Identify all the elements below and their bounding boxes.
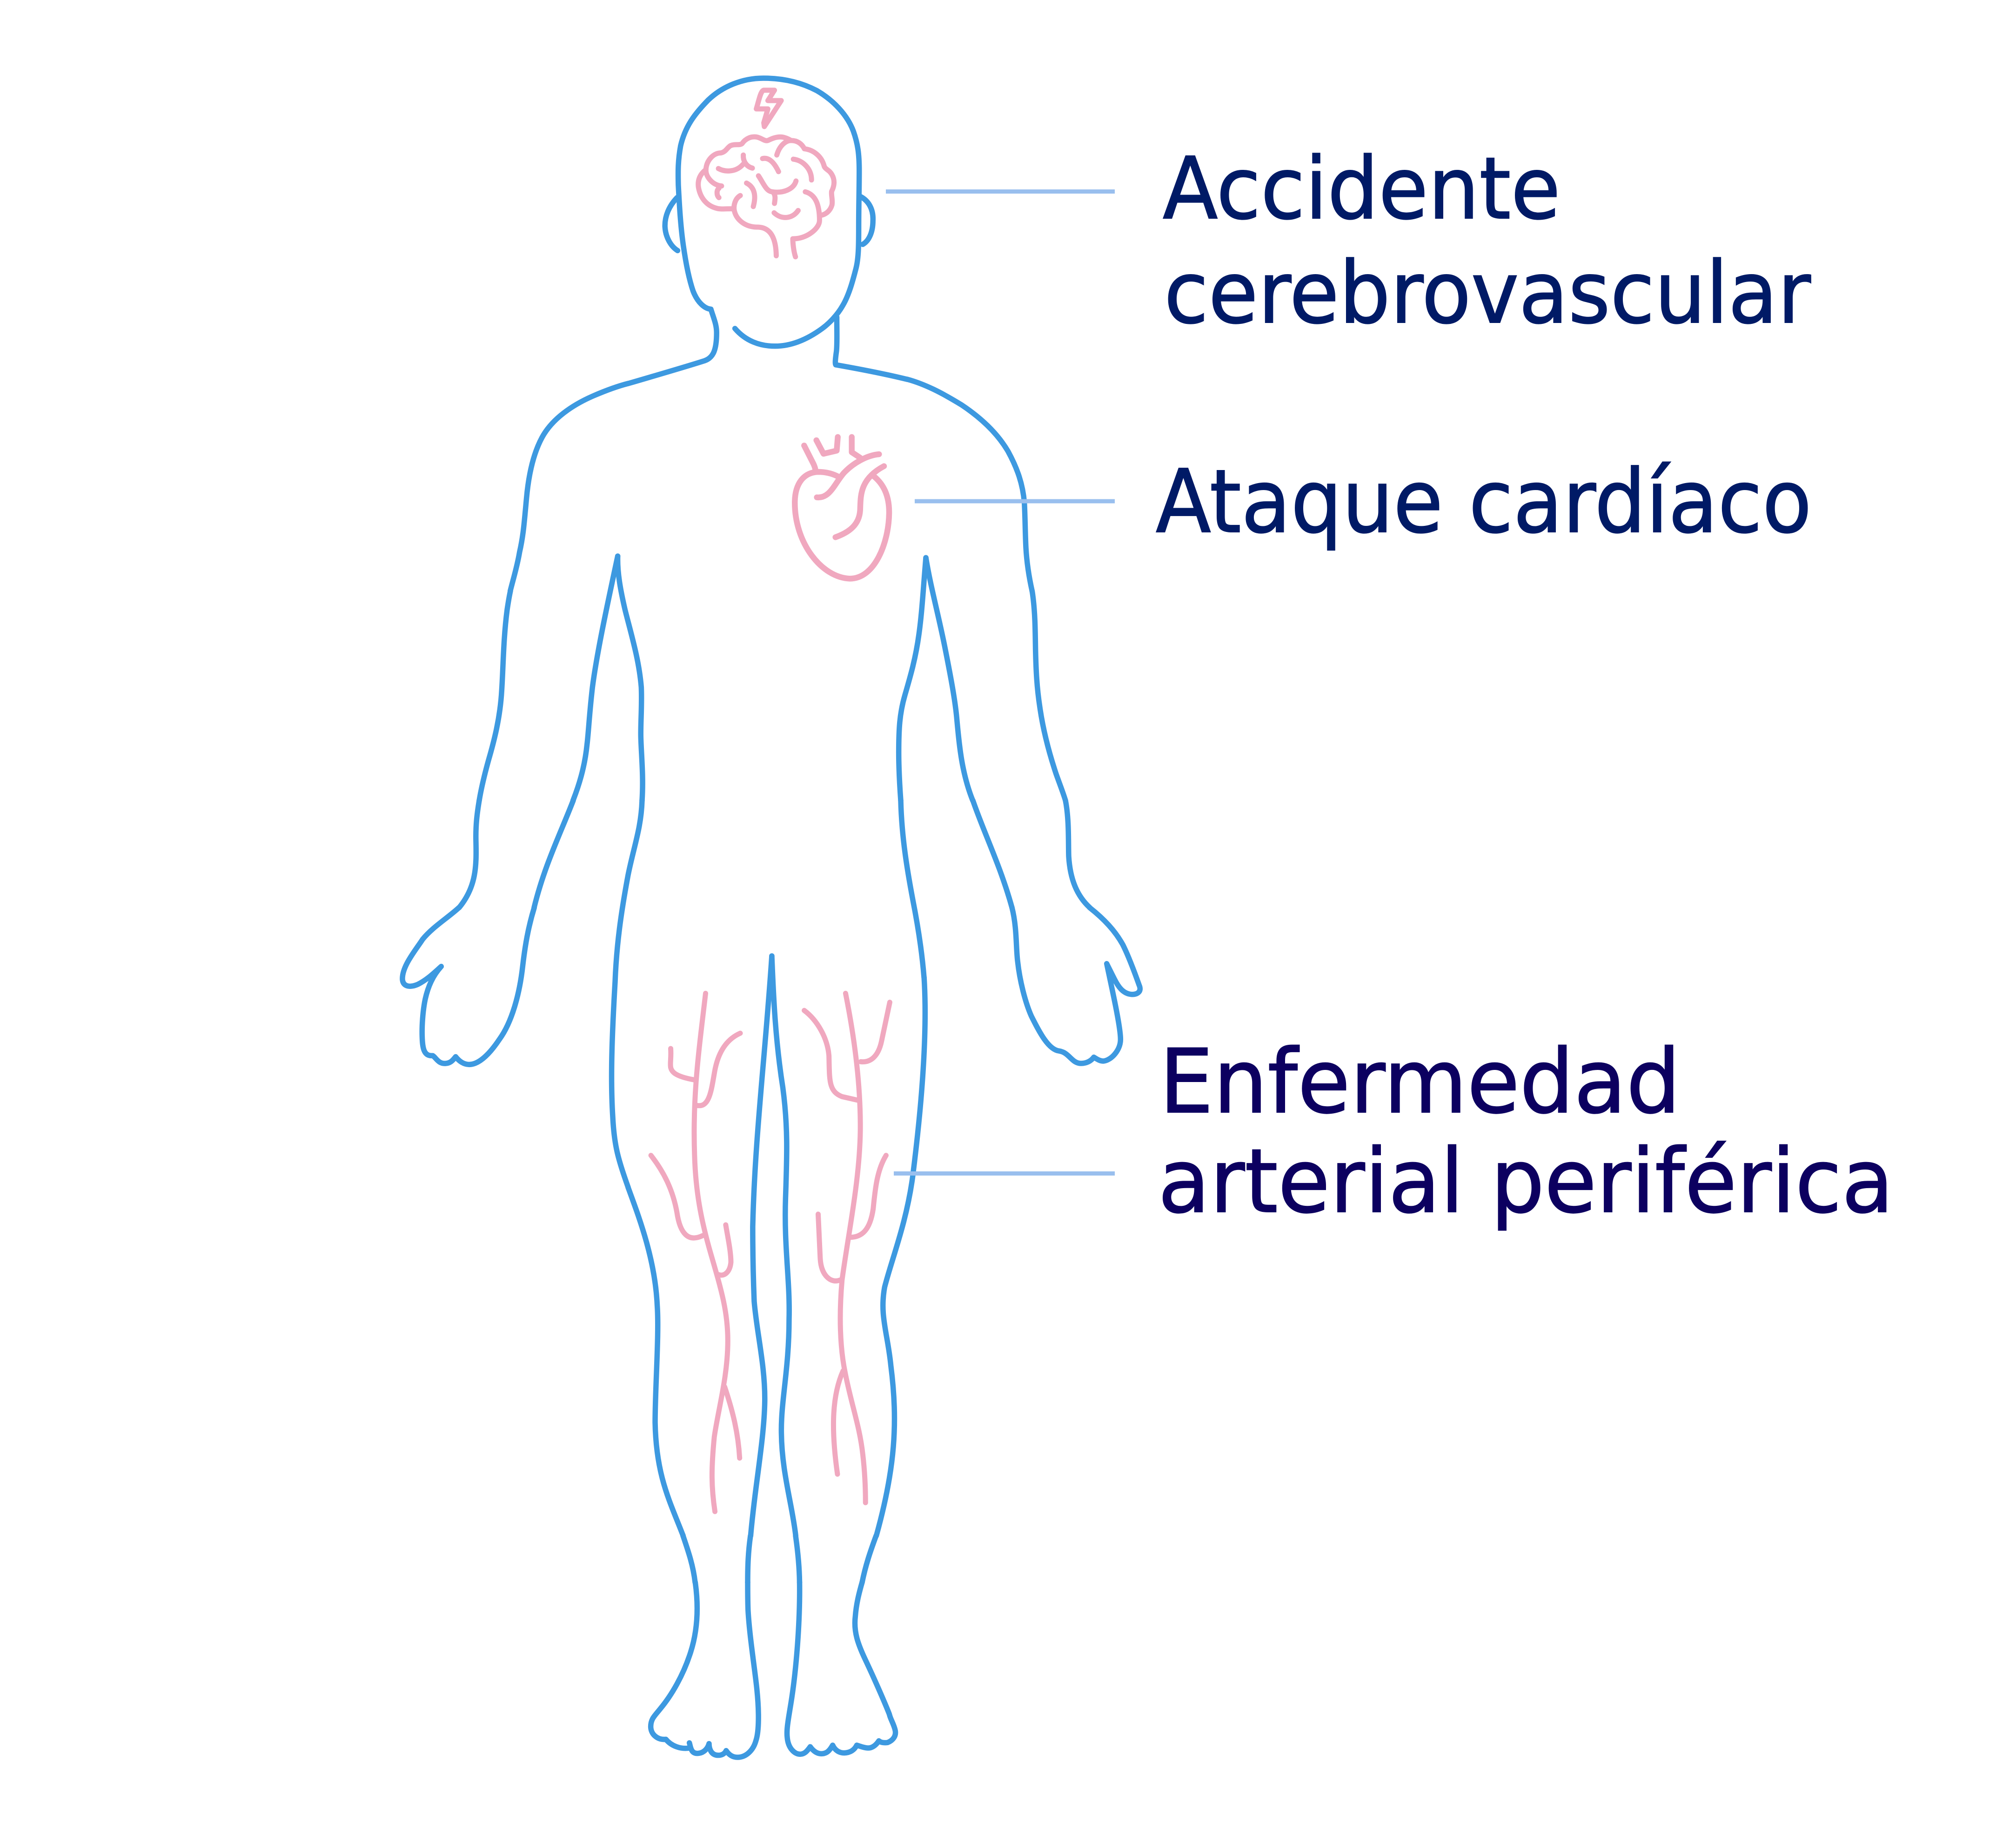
- label: stroke: Accidente: [1163, 139, 1561, 239]
- right shoulder: [907, 379, 1032, 591]
- right hand: [1012, 908, 1140, 1063]
- left arm and torso: [479, 556, 643, 800]
- icon: lightning bolt: [757, 90, 781, 127]
- label: peripheral artery disease: arterial periférica: [1158, 1130, 1894, 1233]
- left shoulder: [510, 383, 628, 591]
- right arm and torso: [899, 558, 1065, 800]
- icon: brain: [698, 137, 834, 257]
- head and left neck: [628, 78, 907, 383]
- icon: heart: [795, 437, 889, 578]
- label: stroke: cerebrovascular: [1164, 243, 1811, 343]
- label: heart attack: Ataque cardíaco: [1156, 451, 1812, 553]
- body outline: [402, 78, 1140, 1757]
- leader line: stroke: [886, 189, 1115, 194]
- left hand: [402, 908, 534, 1064]
- leg arteries: [651, 993, 890, 1512]
- feet: [651, 1582, 896, 1757]
- label: peripheral artery disease: Enfermedad: [1159, 1030, 1681, 1133]
- leader line: peripheral artery disease: [894, 1171, 1115, 1176]
- legs: [628, 956, 925, 1536]
- leader line: heart attack: [915, 499, 1115, 504]
